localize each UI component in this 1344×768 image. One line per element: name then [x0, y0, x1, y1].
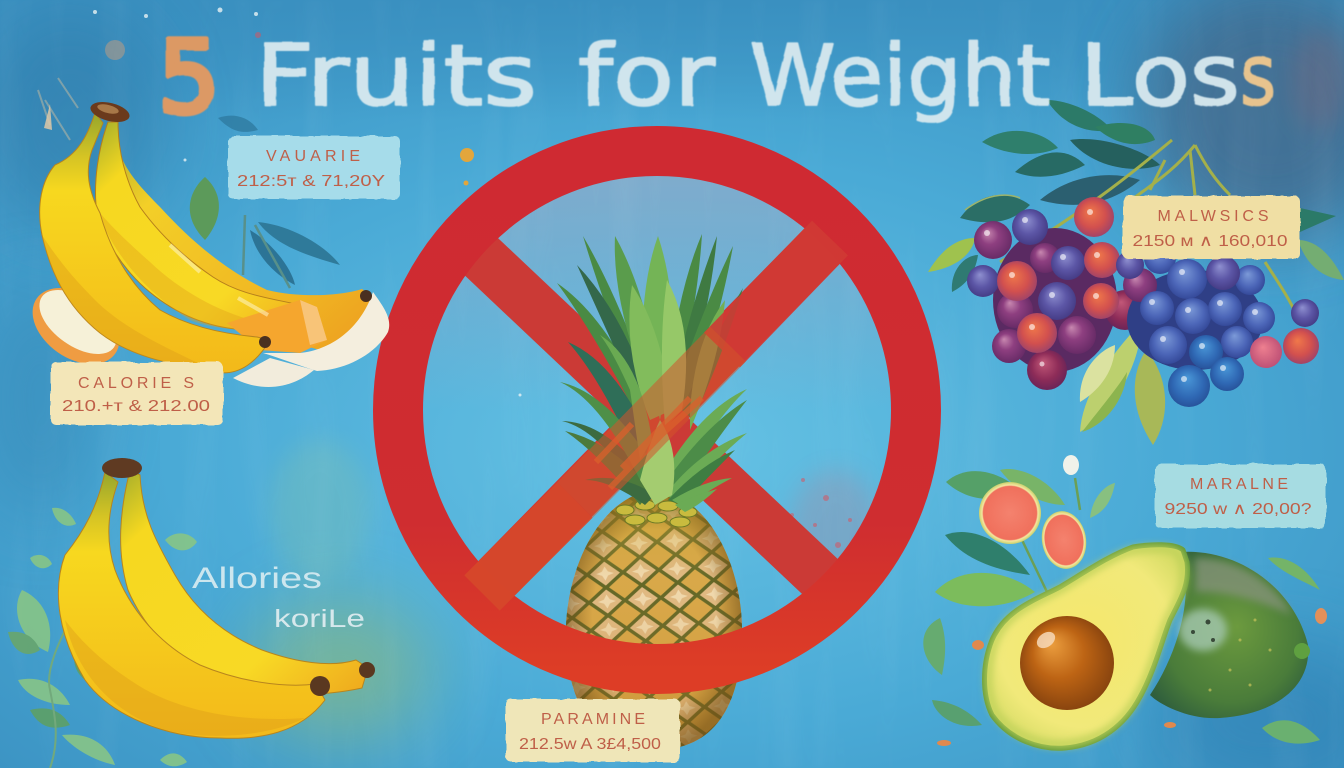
- blue grapes: [1116, 242, 1319, 407]
- label: pineapple cream: PARAMINE: [541, 711, 645, 728]
- banana bunch top left: [18, 98, 389, 387]
- side text: Allories koriLe: koriLe: [274, 605, 365, 633]
- front cross bar over crown: [482, 238, 830, 593]
- grape cluster: [928, 100, 1344, 445]
- title: Weight: [750, 27, 1050, 126]
- halved fruit: [18, 272, 134, 380]
- foliage behind bananas: [190, 116, 340, 288]
- prohibition ring: [398, 151, 916, 669]
- title: 5: [158, 19, 220, 136]
- stems: [1000, 140, 1298, 318]
- banana pair bottom left: [8, 458, 375, 768]
- side text: Allories koriLe: [192, 562, 365, 633]
- label: banana cream: 210.+т & 212.00: [62, 398, 210, 415]
- title: Los: [1080, 27, 1240, 126]
- label: grapes cream: 2150 м ∧ 160,010: [1132, 233, 1288, 250]
- label: pineapple cream: [506, 699, 680, 762]
- label: grapes cream: [1123, 196, 1300, 259]
- side text: Allories koriLe: Allories: [192, 562, 322, 595]
- label: pineapple cream: 212.5w A 3£4,500: [519, 736, 661, 753]
- label: top left blue: 212:5т & 71,20Y: [237, 173, 385, 190]
- avocado whole: [1150, 552, 1310, 718]
- label: top left blue: VAUARIE: [266, 148, 360, 165]
- label: avocado blue: MARALNE: [1190, 476, 1288, 493]
- label: banana cream: CALORIE S: [78, 375, 194, 392]
- title: s: [1240, 27, 1276, 126]
- avocado half: [984, 545, 1188, 748]
- pineapple crown: [557, 234, 747, 512]
- label: avocado blue: 9250 w ∧ 20,00?: [1164, 501, 1312, 518]
- prohibition cross bars: [470, 238, 830, 593]
- pineapple: [557, 234, 747, 750]
- label: banana cream: [51, 362, 223, 425]
- title: for: [578, 27, 715, 126]
- title: [158, 19, 1276, 136]
- purple red grapes: [967, 197, 1145, 390]
- grape foliage: [928, 100, 1344, 445]
- pineapple body: [566, 490, 742, 750]
- scattered leaves around avocado: [923, 557, 1327, 746]
- label: top left blue: [228, 136, 400, 199]
- label: avocado blue: [1155, 464, 1326, 528]
- title: Fruits: [255, 27, 537, 126]
- label: grapes cream: MALWSICS: [1158, 208, 1268, 225]
- plant leaves: [8, 508, 197, 768]
- guava sprig: [935, 455, 1115, 606]
